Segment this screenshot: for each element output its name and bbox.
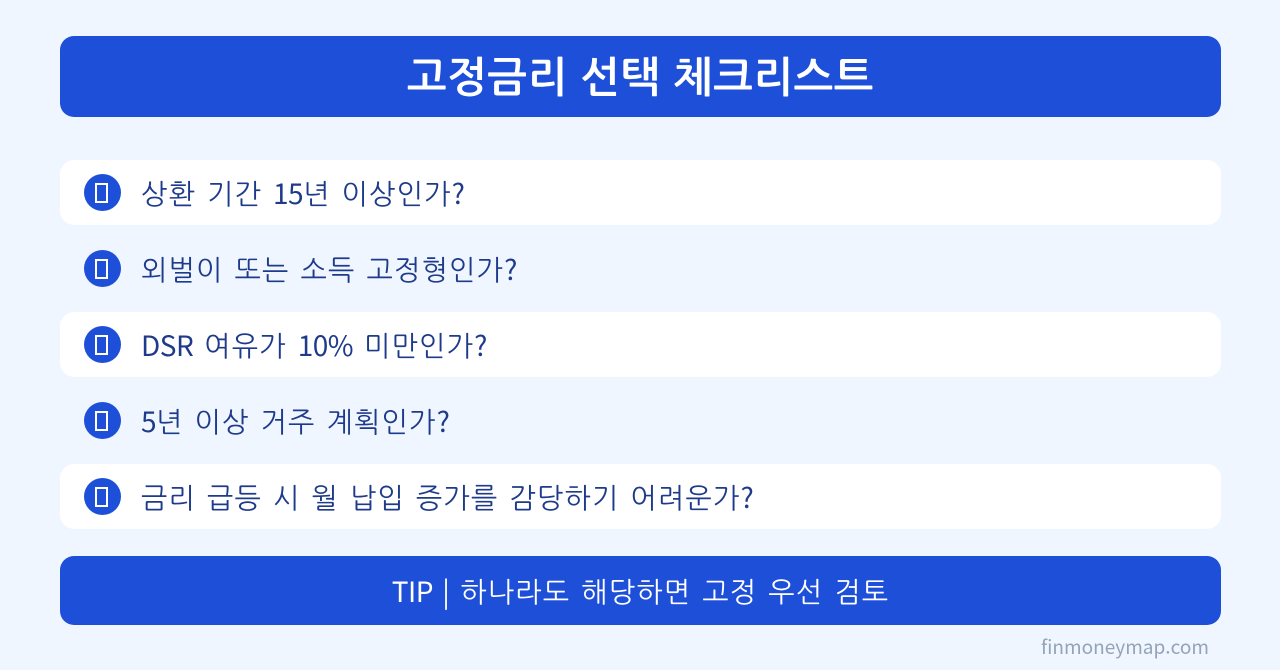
footer source: finmoneymap.com [1041, 633, 1209, 660]
checklist item 4 [84, 401, 449, 441]
title banner [60, 36, 1221, 117]
item text 5: 금리 급등 시 월 납입 증가를 감당하기 어려운가? [141, 477, 753, 517]
checklist item 2 [84, 249, 517, 289]
item text 4: 5년 이상 거주 계획인가? [141, 401, 449, 441]
tip text: TIP | 하나라도 해당하면 고정 우선 검토 [392, 571, 889, 611]
title text: 고정금리 선택 체크리스트 [407, 58, 874, 99]
checklist item 1 [60, 160, 1221, 225]
tip banner [60, 556, 1221, 625]
icon: check badge 1 [84, 174, 121, 211]
checklist item 3 [60, 312, 1221, 377]
item text 3: DSR 여유가 10% 미만인가? [141, 325, 487, 365]
checklist item 5 [60, 464, 1221, 529]
icon: check badge 4 [84, 402, 121, 439]
icon: check badge 2 [84, 250, 121, 287]
item text 2: 외벌이 또는 소득 고정형인가? [141, 249, 517, 289]
icon: check badge 3 [84, 326, 121, 363]
icon: check badge 5 [84, 478, 121, 515]
item text 1: 상환 기간 15년 이상인가? [141, 173, 464, 213]
